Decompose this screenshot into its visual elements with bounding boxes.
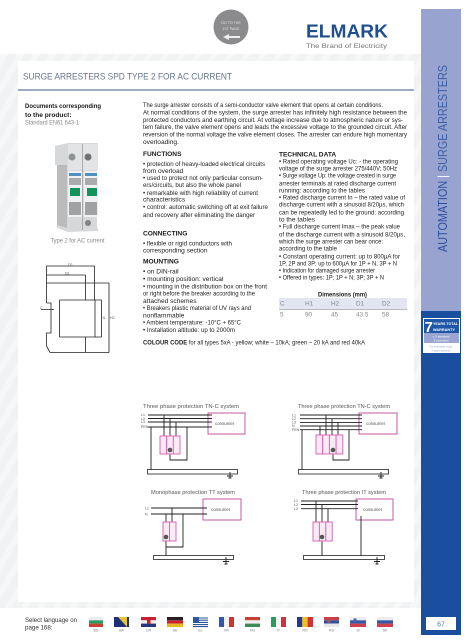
flag: IT: IT — [277, 628, 280, 632]
section: technical data: to the tables — [279, 216, 316, 224]
flag: SK: SK — [383, 628, 388, 632]
language prompt: page 168: — [25, 624, 53, 632]
section: technical data: • Indication for damaged surge arrester — [279, 268, 376, 274]
section: mounting: • mounting position: vertical — [143, 276, 224, 283]
flag: BG — [89, 617, 103, 632]
logo: Elmark: ELMARK — [306, 22, 388, 42]
section: technical data: which the surge arrester can bear once: — [278, 238, 383, 246]
dimensions table: 58 — [382, 312, 390, 318]
section: functions: • protection of heavy-loaded electrical circuits — [143, 161, 266, 168]
section: technical data: • Full discharge current Imax – the peak value — [279, 224, 400, 230]
flag: BA — [114, 617, 129, 632]
dimensions table: D2 — [382, 300, 391, 308]
language prompt — [25, 617, 78, 632]
diagram: three phase TN-C, 4 modules: N — [292, 424, 295, 428]
section: technical data: • Surge voltage Up: the voltage created in surge — [279, 172, 396, 180]
diagram: three phase IT: L2 — [294, 503, 298, 507]
section: technical data: discharge current with a sinusoid 8/20µs, which — [279, 202, 404, 208]
diagram: monophase TT: Monophase protection TT system — [151, 490, 235, 496]
description paragraph: The surge arrester consists of a semi-conductor valve element that opens at certain conditions. — [143, 102, 383, 109]
diagram: three phase IT: consumer — [363, 507, 383, 512]
section: technical data: arrester terminals at rated discharge current — [279, 180, 396, 188]
diagram: three phase TN-C, 3 modules: Three phase protection TN-C system — [143, 404, 239, 410]
flag: FR — [219, 617, 234, 632]
flag: SI — [350, 617, 366, 632]
dimensions table: Dimensions (mm) — [318, 292, 367, 298]
documents block — [25, 103, 101, 126]
dimensions table: 43.5 — [356, 312, 369, 318]
section: technical data: running: according to the tables — [279, 188, 366, 194]
section: connecting: CONNECTING — [143, 230, 187, 238]
photo caption: Type 2 for AC current — [50, 238, 105, 244]
dimensions table: 90 — [305, 312, 313, 318]
description paragraph: protected conductors and earthing circuit. At voltage increase due to atmospheric nature or sys- — [143, 117, 403, 124]
description paragraph: reversion of the normal voltage the valve element closes. The arrester can endure high momentary — [143, 132, 408, 138]
section: technical data: • Constant operating current: up to 800µA for — [279, 254, 401, 260]
section: functions: ers/circuits, but also the whole panel — [143, 182, 241, 189]
section: mounting: attached schemes — [143, 298, 197, 305]
section: mounting — [143, 258, 267, 334]
section: functions: from overload — [143, 168, 184, 175]
section: mounting: • mounting in the distribution box on the front — [143, 284, 267, 290]
diagram: three phase IT — [294, 490, 393, 564]
warranty badge — [423, 318, 460, 353]
section: functions: characteristics — [143, 196, 186, 204]
diagram: three phase IT: L3 — [294, 507, 298, 511]
section: connecting: corresponding section — [143, 248, 208, 254]
warranty badge: YEARS TOTAL — [433, 322, 459, 326]
warranty badge: 3 years warranty — [431, 348, 451, 352]
diagram: three phase TN-C, 3 modules: consumer — [215, 421, 235, 426]
section: connecting: • flexible or rigid conductors with — [143, 240, 232, 248]
dimensions table: H2 — [331, 300, 340, 308]
language prompt: Select language on — [25, 617, 78, 624]
section: mounting: or right before the breaker according to the — [143, 290, 255, 298]
dimensions table: D1 — [356, 300, 365, 308]
flag: SI: SI — [356, 628, 360, 632]
documents block: to the product: — [25, 112, 72, 119]
section: functions — [143, 151, 268, 219]
description paragraph — [143, 102, 408, 146]
page number — [426, 617, 456, 630]
dimensions table: C — [280, 300, 285, 308]
diagram: three phase TN-C, 3 modules: L2 — [141, 417, 145, 421]
description paragraph: tem failure, the valve element opens and leads the excessive voltage to the grounded circuit. After — [143, 124, 408, 131]
dimensions table: 5 — [280, 312, 284, 318]
section: technical data: • Rated discharge current In – the rated value of — [279, 194, 405, 202]
section: technical data: TECHNICAL DATA — [279, 152, 336, 158]
section: functions: • control: automatic switching off at exit failure — [143, 204, 268, 211]
flag: RS — [324, 617, 339, 632]
section: mounting: MOUNTING — [143, 258, 179, 266]
flag: RO — [297, 617, 313, 632]
button: go to the 1st page: GO TO THE — [221, 21, 241, 25]
warranty badge: For individual usage — [429, 344, 453, 348]
flag: SK — [377, 617, 393, 632]
documents block: Documents corresponding — [25, 103, 101, 110]
flag: HU — [245, 617, 260, 632]
logo: Elmark — [306, 22, 388, 50]
warranty badge: 7 — [424, 319, 433, 336]
page background panel — [0, 54, 421, 608]
section: technical data: • Offered in types: 1P; 1P + N; 3P; 3P + N — [279, 274, 384, 282]
dimensions table: 45 — [331, 312, 339, 318]
flag: CR: CR — [146, 628, 151, 632]
flag: BA: BA — [119, 628, 124, 632]
diagram: three phase TN-C, 4 modules: L3 — [292, 420, 296, 424]
diagram: three phase TN-C, 4 modules: L2 — [292, 417, 296, 421]
white content panel — [18, 61, 414, 602]
section: mounting: nonflammable — [143, 312, 185, 320]
section: technical data: • Rated operating voltage Uc: - the operating — [279, 158, 398, 166]
section: technical data: voltage of the surge arrester 275/440V; 50Hz — [279, 166, 397, 172]
title: SURGE ARRESTERS SPD TYPE 2 FOR AC CURRENT — [23, 72, 232, 82]
section: functions: and recovery after eliminating the danger — [143, 212, 256, 219]
section: technical data: according to the table — [279, 246, 337, 252]
diagram: three phase TN-C, 4 modules: Three phase protection TN-C system — [298, 404, 390, 410]
section: technical data: can be repeatedly led to the ground: according — [279, 210, 404, 216]
product photo: surge arrester — [55, 143, 98, 232]
button: go to the 1st page — [214, 10, 248, 44]
side tab: category: AUTOMATION | SURGE ARRESTERS — [435, 65, 450, 252]
logo: Elmark: The Brand of Electricity — [306, 44, 387, 50]
section: functions: • remarkable with high reliability of current — [143, 190, 258, 197]
flag: EL: EL — [198, 628, 203, 632]
button: go to the 1st page: 1ST PAGE — [222, 27, 240, 31]
section: technical data: of the discharge current with a sinusoid 8/20µs, — [279, 232, 405, 238]
diagram: three phase TN-C, 4 modules: consumer — [366, 421, 386, 426]
flag: HU: HU — [250, 628, 255, 632]
section: technical data — [278, 152, 405, 282]
flag: RS: RS — [329, 628, 335, 632]
diagram: three phase TN-C, 4 modules: PEN — [292, 428, 300, 432]
diagram: monophase TT: consumer — [211, 507, 231, 512]
diagram: monophase TT — [145, 490, 241, 564]
dimensions table — [279, 292, 407, 318]
dimensions table: H1 — [305, 300, 314, 308]
dimension drawing — [40, 263, 115, 352]
flag: EL — [193, 617, 208, 632]
diagram: three phase IT: Three phase protection IT system — [302, 490, 386, 496]
section: functions: FUNCTIONS — [143, 151, 182, 158]
diagram: three phase TN-C, 3 modules: L1 — [141, 413, 145, 417]
flag: DE — [167, 617, 183, 632]
diagram: three phase TN-C, 3 modules — [141, 404, 245, 478]
dimension drawing: D1 — [65, 272, 70, 276]
flag: CR — [141, 617, 156, 632]
diagram: monophase TT: L1 — [145, 506, 149, 510]
flag: BG: BG — [94, 628, 99, 632]
section: connecting — [143, 230, 232, 254]
diagram: three phase IT: L1 — [294, 499, 298, 503]
colour code note: COLOUR CODE for all types 5xA - yellow; white – 10kA; green – 20 kA and red 40kA — [143, 340, 366, 346]
diagram: three phase TN-C, 4 modules — [292, 404, 397, 478]
diagram: three phase TN-C, 4 modules: L1 — [292, 414, 296, 418]
section: mounting: • Breakers plastic material of UV rays and — [143, 305, 251, 312]
description paragraph: overloading. — [143, 139, 179, 146]
flag: IT — [271, 617, 286, 632]
section: mounting: • on DIN-rail — [143, 268, 179, 276]
flag: DE: DE — [173, 628, 178, 632]
flag: RO: RO — [302, 628, 308, 632]
section: mounting: • Installation altitude: up to 2000m — [143, 327, 235, 334]
diagram: three phase TN-C, 3 modules: L3 — [141, 420, 145, 424]
warranty badge: 3 extended — [434, 338, 449, 342]
section: technical data: 1P, 2P and 3P; up to 600µA for 1P + N, 3P + N — [279, 260, 397, 268]
flag: FR: FR — [224, 628, 229, 632]
dimension drawing: H1 — [101, 316, 106, 320]
page number: 67 — [437, 622, 445, 628]
side tab: blue strip — [421, 311, 461, 635]
dimension drawing: H2 — [110, 316, 115, 320]
section: mounting: • Ambient temperature: -10°C + 65°C — [143, 318, 241, 326]
documents block: Standard EN61 643-1 — [25, 120, 79, 126]
diagram: monophase TT: N — [145, 512, 148, 516]
warranty badge: WARRANTY — [433, 328, 455, 332]
dimension drawing: C — [40, 306, 43, 310]
dimension drawing: D2 — [68, 263, 73, 267]
side tab: category — [421, 9, 461, 311]
diagram: three phase TN-C, 3 modules: PEN — [141, 425, 149, 429]
warranty badge: + 2 standard — [433, 334, 450, 338]
section: functions: • used to protect not only particular consum- — [143, 175, 263, 182]
description paragraph: At normal conditions of the system, the surge arrester has infinitely high resistance between the — [143, 110, 407, 116]
